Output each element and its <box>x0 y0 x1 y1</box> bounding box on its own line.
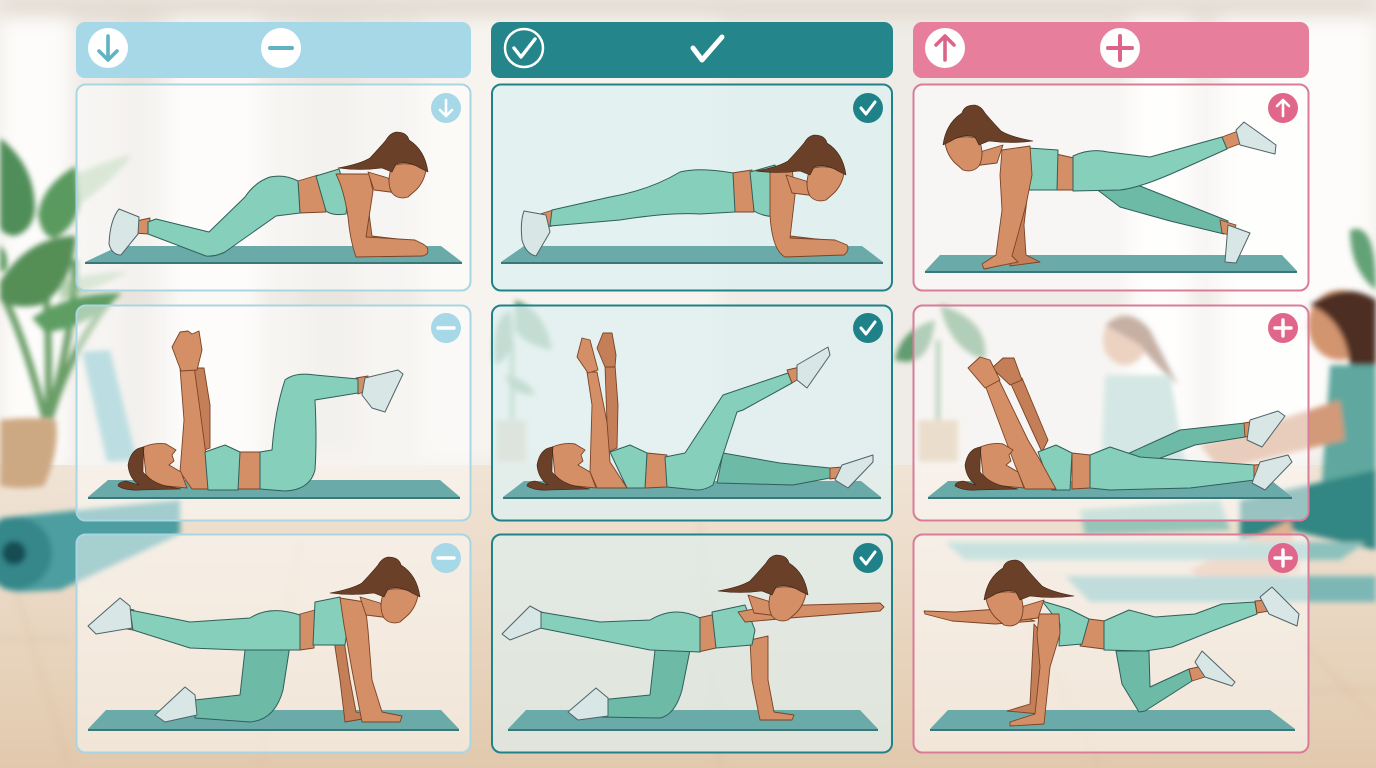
head <box>330 557 420 623</box>
icon: badge check <box>853 543 883 573</box>
mat <box>928 481 1292 498</box>
icon: check <box>693 37 722 60</box>
figure: dead bug with bent leg <box>118 331 403 491</box>
head <box>943 105 1033 171</box>
figure: dead bug with extended leg <box>527 333 873 490</box>
mat <box>508 710 878 730</box>
panel: easier bird dog <box>76 534 470 752</box>
head <box>118 443 187 490</box>
head <box>338 132 428 198</box>
header: too easy column <box>76 22 471 78</box>
icon: circled check <box>505 29 543 67</box>
panel: harder dead bug <box>914 306 1308 520</box>
figure: bird dog with leg lift <box>88 557 420 722</box>
icon: badge check <box>853 93 883 123</box>
figure: forearm plank <box>521 135 848 257</box>
mat <box>501 246 883 263</box>
mat <box>503 481 881 498</box>
header: correct column <box>491 22 893 78</box>
icon: badge check <box>853 313 883 343</box>
mat <box>925 255 1297 272</box>
figure: dead bug with both legs low <box>955 357 1292 490</box>
figure: bird dog with knee tuck kick <box>924 560 1299 726</box>
head <box>984 560 1074 626</box>
icon: badge down <box>431 93 461 123</box>
icon: minus <box>261 28 301 68</box>
icon: badge plus <box>1268 313 1298 343</box>
head <box>527 443 596 490</box>
figure: bird dog with arm and leg lift <box>502 555 884 720</box>
icon: badge minus <box>431 313 461 343</box>
mat <box>88 480 460 498</box>
icon: plus <box>1100 28 1140 68</box>
icon: up arrow <box>925 28 965 68</box>
figure: straight-arm plank with leg lift <box>943 105 1276 269</box>
mat <box>88 710 459 730</box>
icon: badge plus <box>1268 543 1298 573</box>
mat <box>930 710 1295 730</box>
icon: badge up <box>1268 93 1298 123</box>
head <box>718 555 808 621</box>
head <box>756 135 846 201</box>
panel: correct dead bug <box>492 306 892 520</box>
panel: correct forearm plank <box>492 84 892 290</box>
mat <box>85 246 462 263</box>
icon: badge minus <box>431 543 461 573</box>
panel: easier forearm plank <box>76 84 470 290</box>
figure: knee plank <box>109 132 428 257</box>
background plant left <box>0 138 132 488</box>
panel: harder bird dog <box>914 534 1308 752</box>
panel: correct bird dog <box>492 534 892 752</box>
header: harder column <box>913 22 1309 78</box>
panel: harder plank with leg lift <box>914 84 1308 290</box>
head <box>955 443 1024 490</box>
icon: down arrow <box>88 28 128 68</box>
panel: easier dead bug <box>76 306 470 520</box>
